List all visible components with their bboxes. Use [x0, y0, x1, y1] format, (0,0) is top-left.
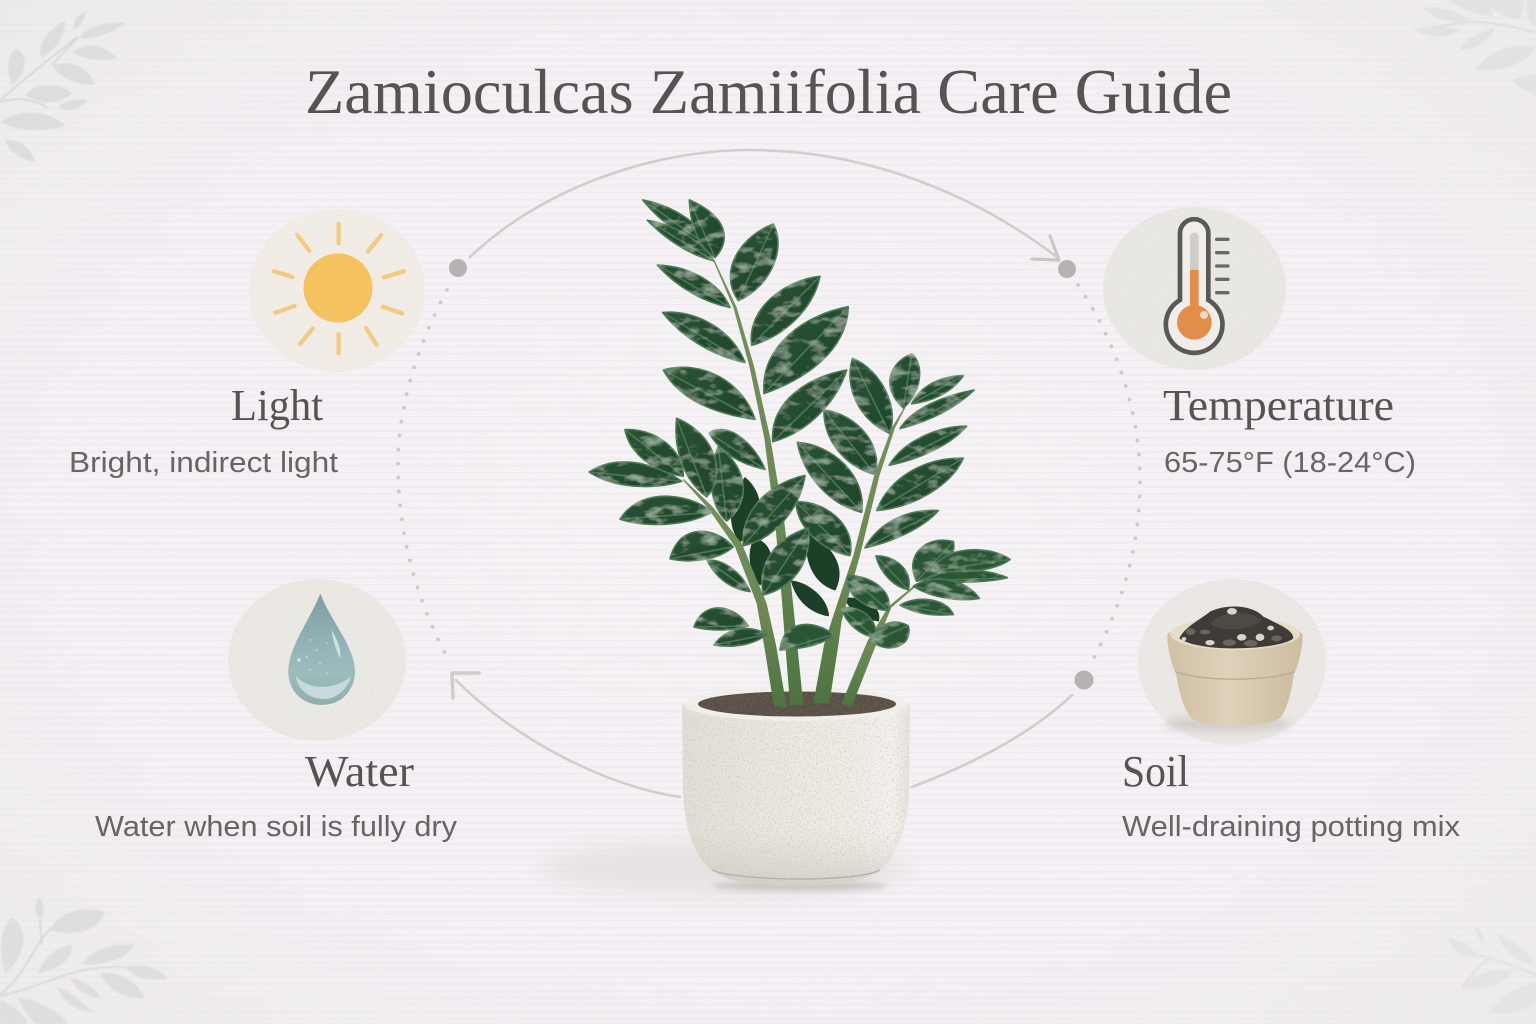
dotted arc: water to light — [398, 290, 450, 662]
decorative leaves: bottom right corner — [1448, 927, 1536, 1014]
text: water: Water when soil is fully dry — [95, 811, 458, 843]
dotted arc: temperature to soil — [1078, 285, 1140, 665]
icon: water drop — [228, 578, 406, 742]
decorative leaves: top left corner — [0, 11, 126, 162]
arc: light to temperature — [470, 150, 1058, 258]
node: temperature — [1058, 260, 1076, 278]
arrow head: temperature — [1032, 236, 1059, 260]
back leaves — [732, 478, 879, 621]
plant in ceramic pot — [589, 200, 1010, 887]
text: temperature: 65-75°F (18-24°C) — [1164, 447, 1416, 479]
arc: soil to pot — [912, 695, 1072, 787]
heading: water: Water — [305, 747, 414, 796]
arrow head: water — [452, 673, 479, 698]
care cycle ring with arrows — [398, 150, 1140, 797]
heading: soil: Soil — [1122, 747, 1189, 796]
short right stem leaves — [780, 540, 1010, 650]
panel: light — [69, 208, 425, 479]
heading: light: Light — [231, 381, 323, 430]
decorative leaves: top right corner — [1413, 0, 1536, 95]
right stem — [813, 407, 906, 703]
tall central stem — [713, 259, 803, 705]
icon: thermometer — [1102, 206, 1288, 371]
panel: temperature — [1102, 206, 1416, 479]
text: soil: Well-draining potting mix — [1122, 811, 1461, 843]
icon: sun — [249, 208, 425, 373]
right stem leaves — [796, 354, 974, 555]
ground shadow under pot — [540, 842, 910, 894]
tall stem leaves — [643, 200, 848, 469]
node: light — [449, 259, 467, 277]
short right stem — [842, 584, 917, 707]
title: Zamioculcas Zamiifolia Care Guide — [305, 57, 1232, 127]
pot soil — [698, 692, 896, 716]
arc: pot to water — [456, 680, 680, 797]
left stem leaves — [589, 418, 809, 646]
node: soil — [1074, 670, 1094, 690]
panel: water — [95, 578, 458, 843]
panel: soil — [1122, 578, 1461, 843]
icon: pot of soil — [1138, 578, 1328, 746]
heading: temperature: Temperature — [1163, 381, 1394, 430]
text: light: Bright, indirect light — [69, 447, 338, 479]
decorative leaves: bottom left corner — [0, 897, 168, 1024]
ceramic pot — [680, 687, 912, 887]
plant foliage and stems — [589, 200, 1010, 707]
left stem — [683, 479, 787, 707]
